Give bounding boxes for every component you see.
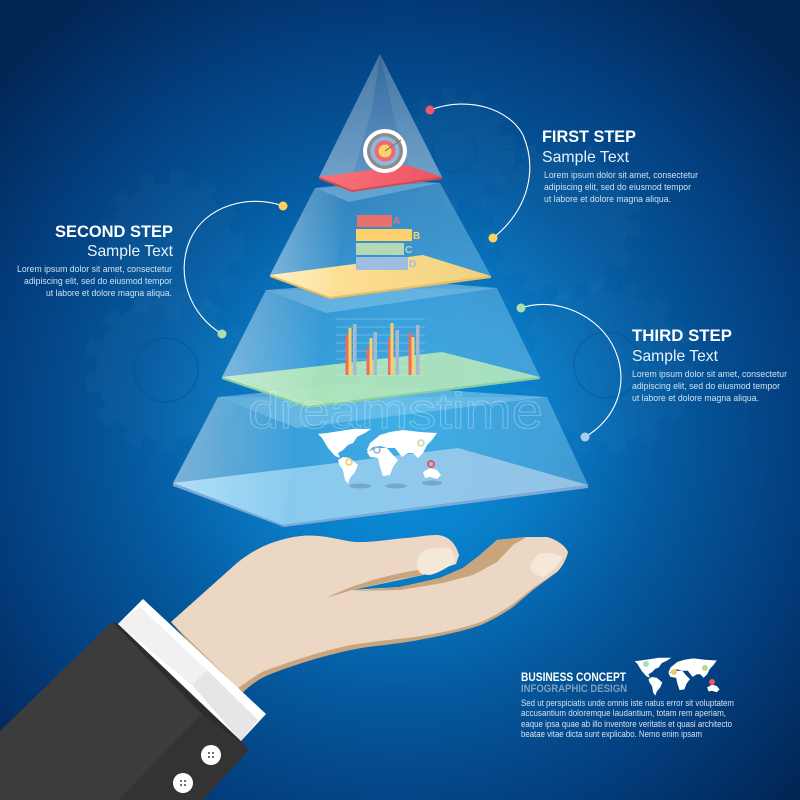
text: third step: adipiscing elit, sed do eiusmod tempor bbox=[632, 381, 780, 391]
connector: first step bbox=[426, 104, 530, 242]
fingernail 2 bbox=[530, 553, 563, 577]
text: third step: ut labore et dolore magna aliqua. bbox=[632, 393, 759, 403]
icon: stacked ABCD bars: A bbox=[393, 216, 400, 227]
text: second step: SECOND STEP bbox=[55, 222, 173, 241]
text: second step: Lorem ipsum dolor sit amet, consectetur bbox=[17, 264, 172, 274]
tier 4: base layer bbox=[173, 384, 588, 527]
icon: target bbox=[363, 129, 407, 173]
text: third step: Sample Text bbox=[632, 348, 719, 365]
suit sleeve bbox=[0, 622, 249, 800]
pyramid bbox=[173, 54, 588, 527]
small world map bbox=[635, 658, 720, 696]
tier 3: green layer bbox=[222, 280, 540, 408]
text: first step: ut labore et dolore magna aliqua. bbox=[544, 194, 671, 204]
tier 2: yellow layer bbox=[270, 180, 491, 299]
text: first step bbox=[542, 127, 698, 204]
finger gap shadow: lower strip bbox=[352, 537, 527, 591]
text: first step: adipiscing elit, sed do eiusmod tempor bbox=[544, 182, 691, 192]
business concept text: BUSINESS CONCEPT bbox=[521, 670, 627, 684]
button 1 bbox=[201, 745, 221, 765]
icon: stacked ABCD bars: D bbox=[409, 259, 416, 270]
text: second step: adipiscing elit, sed do eiusmod tempor bbox=[24, 276, 172, 286]
icon: stacked ABCD bars: B bbox=[413, 231, 420, 242]
business concept text: eaque ipsa quae ab illo inventore veritatis et quasi architecto bbox=[521, 719, 732, 729]
background gears bbox=[90, 94, 688, 480]
icon: stacked ABCD bars bbox=[356, 215, 420, 270]
icon: stacked ABCD bars: C bbox=[405, 245, 412, 256]
fingernail 1 bbox=[417, 548, 455, 575]
text: first step: Sample Text bbox=[542, 149, 630, 166]
text: third step bbox=[632, 326, 787, 403]
watermark: dreamstime bbox=[248, 383, 543, 439]
text: second step bbox=[17, 222, 174, 298]
hand: shaded underside bbox=[171, 535, 568, 698]
business concept text: Sed ut perspiciatis unde omnis iste natus error sit voluptatem bbox=[521, 698, 734, 708]
shirt cuff bbox=[118, 599, 266, 741]
connector: third step bbox=[516, 304, 621, 442]
bar chart bbox=[336, 319, 425, 375]
text: third step: THIRD STEP bbox=[632, 326, 732, 345]
text: third step: Lorem ipsum dolor sit amet, consectetur bbox=[632, 369, 787, 379]
tier 1: red top layer bbox=[319, 54, 442, 192]
business concept text: accusantium doloremque laudantium, totam rem aperiam, bbox=[521, 708, 726, 718]
connector: second step bbox=[184, 201, 288, 338]
text: second step: ut labore et dolore magna aliqua. bbox=[46, 288, 172, 298]
hand bbox=[171, 535, 568, 698]
icon: world map with pins bbox=[318, 429, 442, 488]
hand: skin bbox=[171, 535, 568, 688]
business concept text: beatae vitae dicta sunt explicabo. Nemo enim ipsam bbox=[521, 729, 702, 739]
business concept text: INFOGRAPHIC DESIGN bbox=[521, 683, 627, 695]
text: first step: Lorem ipsum dolor sit amet, consectetur bbox=[544, 170, 698, 180]
button 2 bbox=[173, 773, 193, 793]
text: second step: Sample Text bbox=[87, 243, 174, 260]
finger gap shadow: upper finger bbox=[326, 570, 423, 598]
business concept text bbox=[521, 670, 734, 739]
text: first step: FIRST STEP bbox=[542, 127, 636, 146]
